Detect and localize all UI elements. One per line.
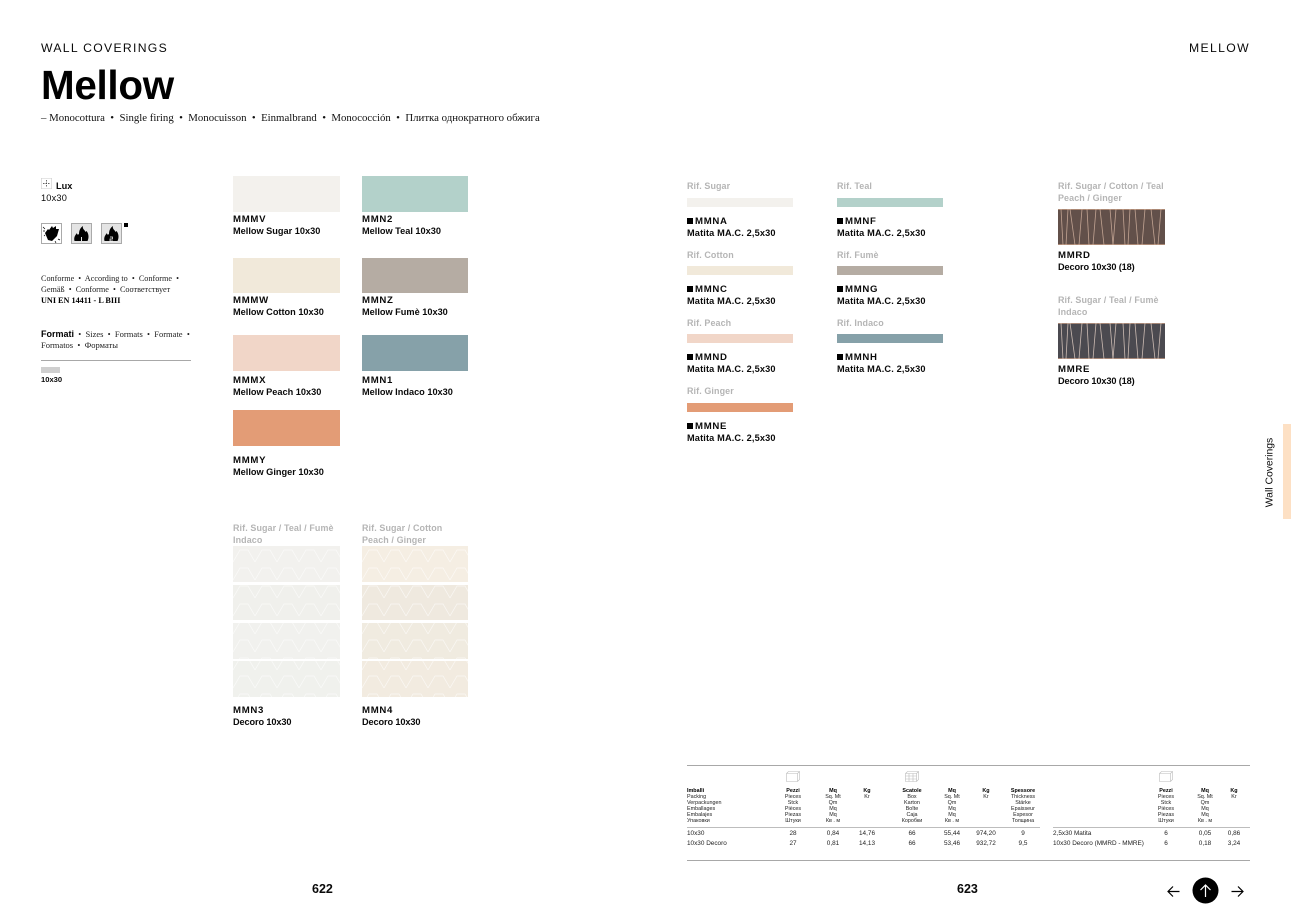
label: MMN4 references: Rif. Sugar / Cotton xyxy=(362,523,442,533)
column: box sq m: Qm xyxy=(948,800,956,806)
swatch: Teal xyxy=(362,176,468,212)
column: box sq m: Mq xyxy=(948,806,956,812)
table row: 10x30 Decoro: 27 xyxy=(789,840,797,847)
column: trim pieces: Pièces xyxy=(1158,806,1174,812)
trim: Fumè reference: Rif. Fumè xyxy=(837,250,879,260)
column: thickness: Spessore xyxy=(1011,788,1035,794)
table row: 10x30: 0,05 xyxy=(1199,830,1211,837)
trim swatch: Teal xyxy=(837,198,943,207)
table row: 10x30 Decoro: 10x30 Decoro xyxy=(687,840,727,847)
column: box: Caja xyxy=(906,812,918,818)
label: MMMW: MMMW xyxy=(233,295,269,306)
label: MMRE xyxy=(1058,364,1135,386)
trim label: MMNE xyxy=(687,421,776,443)
trim swatch: Peach xyxy=(687,334,793,343)
column: kg: Kr xyxy=(864,794,870,800)
table row: 10x30 Decoro: 14,13 xyxy=(859,840,875,847)
label: MMMY: Mellow Ginger 10x30 xyxy=(233,467,324,477)
table row: 10x30: 9 xyxy=(1021,830,1025,837)
column: sq m: Qm xyxy=(829,800,837,806)
trim label: MMNF: MMNF xyxy=(845,216,877,227)
column: sq m xyxy=(825,788,841,824)
column: box sq m xyxy=(927,788,977,824)
packing table xyxy=(687,765,1250,861)
arrow: next xyxy=(1231,885,1244,898)
swatch: Cotton xyxy=(233,258,340,293)
trim swatch: Cotton xyxy=(687,266,793,275)
column: box: Karton xyxy=(904,800,920,806)
column: trim kg: Kr xyxy=(1231,794,1237,800)
label: MMMW: Mellow Cotton 10x30 xyxy=(233,307,324,317)
column: sq m: Mq xyxy=(829,806,837,812)
trim swatch: Indaco xyxy=(837,334,943,343)
icon: pieces box xyxy=(786,771,800,782)
column: thickness: Thickness xyxy=(1011,794,1035,800)
column: trim pieces: Штуки xyxy=(1158,818,1174,824)
column: trim pieces xyxy=(1141,788,1191,824)
label: MMN3 references: Indaco xyxy=(233,535,262,545)
table row: 10x30 Decoro: 6 xyxy=(1164,840,1168,847)
column: trim kg: Kg xyxy=(1230,788,1238,794)
trim label: MMND: MMND xyxy=(695,352,728,363)
format: 10x30 xyxy=(41,193,67,203)
table row labels: Imballi xyxy=(687,788,704,794)
decor: MMRD references xyxy=(1058,181,1164,203)
trim label: MMND: Matita MA.C. 2,5x30 xyxy=(687,364,776,374)
label: MMRD: MMRD xyxy=(1058,250,1091,261)
finish name: Lux xyxy=(56,181,72,191)
trim label: MMNA: Matita MA.C. 2,5x30 xyxy=(687,228,776,238)
table row: 10x30: 55,44 xyxy=(944,830,960,837)
button: back to top xyxy=(1192,877,1219,904)
label: MMRD: Decoro 10x30 (18) xyxy=(1058,262,1135,272)
table row labels: Emballages xyxy=(687,806,715,812)
column: thickness: Epaisseur xyxy=(1011,806,1035,812)
label: MMN3: Decoro 10x30 xyxy=(233,717,291,727)
label: MMN3 xyxy=(233,705,292,727)
trim swatch: Sugar xyxy=(687,198,793,207)
arrow: previous xyxy=(1167,885,1180,898)
decor: MMRD references: Rif. Sugar / Cotton / Teal xyxy=(1058,181,1164,191)
side tab xyxy=(1283,424,1291,519)
table row: 10x30 xyxy=(687,829,1250,839)
standards text: UNI EN 14411 - L BIII xyxy=(41,296,120,305)
trim label: MMNF: Matita MA.C. 2,5x30 xyxy=(837,228,926,238)
column: trim pieces: Stck xyxy=(1161,800,1171,806)
table row: 10x30 Decoro: 66 xyxy=(908,840,916,847)
column: box kg: Kr xyxy=(983,794,989,800)
label: MMMY xyxy=(233,455,324,477)
trim swatch: Ginger xyxy=(687,403,793,412)
column: trim pieces: Pieces xyxy=(1158,794,1174,800)
trim label: MMNG: MMNG xyxy=(845,284,878,295)
column: thickness: Espesor xyxy=(1013,812,1033,818)
swatch: Ginger xyxy=(233,410,340,446)
label: MMN2: MMN2 xyxy=(362,214,393,225)
sizes text xyxy=(41,329,190,350)
trim label: MMNA xyxy=(687,216,776,238)
trim label: MMNA: MMNA xyxy=(695,216,728,227)
table row: 10x30 Decoro: 0,81 xyxy=(827,840,839,847)
label: MMN1 xyxy=(362,375,453,397)
column: sq m: Кв . м xyxy=(826,818,840,824)
page number left: 622 xyxy=(312,882,333,896)
column: pieces: Piezas xyxy=(785,812,801,818)
decor: MMRE references: Indaco xyxy=(1058,307,1087,317)
header: section label: WALL COVERINGS xyxy=(41,41,168,55)
table row labels: Verpackungen xyxy=(687,800,721,806)
sizes text: Formatos • Форматы xyxy=(41,340,118,350)
trim label: MMNE: MMNE xyxy=(695,421,727,432)
label: MMMX xyxy=(233,375,321,397)
tile: MMRE metallic decor xyxy=(1058,323,1165,359)
column: trim sq m: Sq. Mt xyxy=(1197,794,1213,800)
table row: 10x30 Decoro: 10x30 Decoro (MMRD - MMRE) xyxy=(1053,840,1144,847)
trim label: MMNH: Matita MA.C. 2,5x30 xyxy=(837,364,926,374)
label: MMMX: MMMX xyxy=(233,375,266,386)
trim swatch: Fumè xyxy=(837,266,943,275)
label: MMNZ: MMNZ xyxy=(362,295,394,306)
trim: Cotton reference: Rif. Cotton xyxy=(687,250,734,260)
trim label: MMNF xyxy=(837,216,926,238)
label: MMNZ: Mellow Fumè 10x30 xyxy=(362,307,448,317)
column: box sq m: Mq xyxy=(948,812,956,818)
table row: 10x30 Decoro: 53,46 xyxy=(944,840,960,847)
label: MMMV xyxy=(233,214,320,236)
label: MMMV: MMMV xyxy=(233,214,266,225)
column: box: Boîte xyxy=(906,806,918,812)
swatch: Sugar xyxy=(233,176,340,212)
table row: 10x30: 6 xyxy=(1164,830,1168,837)
column: box: Коробки xyxy=(902,818,922,824)
standards text: Conforme • According to • Conforme • xyxy=(41,274,179,283)
table row: 10x30: 2,5x30 Matita xyxy=(1053,830,1091,837)
column: trim pieces: Pezzi xyxy=(1159,788,1173,794)
label: MMN4 references: Peach / Ginger xyxy=(362,535,426,545)
label: MMMW xyxy=(233,295,324,317)
table row: 10x30: 14,76 xyxy=(859,830,875,837)
column: pieces: Штуки xyxy=(785,818,801,824)
column: pieces xyxy=(785,788,801,824)
column: sq m: Mq xyxy=(829,788,837,794)
table row: 10x30 Decoro xyxy=(687,839,1250,849)
column: pieces: Stck xyxy=(788,800,798,806)
table row: 10x30 Decoro: 9,5 xyxy=(1019,840,1027,847)
trim label: MMND xyxy=(687,352,776,374)
icon: fire class 2 xyxy=(101,223,122,244)
label: MMN1: Mellow Indaco 10x30 xyxy=(362,387,453,397)
table row: 10x30: 28 xyxy=(789,830,797,837)
swatch: Peach xyxy=(233,335,340,371)
tile: MMRD metallic decor xyxy=(1058,209,1165,245)
decor: MMRD references: Peach / Ginger xyxy=(1058,193,1122,203)
label: MMMV: Mellow Sugar 10x30 xyxy=(233,226,320,236)
column: trim pieces: Piezas xyxy=(1158,812,1174,818)
column: trim sq m: Кв . м xyxy=(1198,818,1212,824)
tile stack: MMN3 decor xyxy=(233,546,340,697)
decor: MMRE references: Rif. Sugar / Teal / Fumè xyxy=(1058,295,1159,305)
column: kg xyxy=(842,788,892,800)
trim: Peach reference: Rif. Peach xyxy=(687,318,731,328)
label: MMRE: Decoro 10x30 (18) xyxy=(1058,376,1135,386)
table row: 10x30: 10x30 xyxy=(687,830,704,837)
trim: Sugar reference: Rif. Sugar xyxy=(687,181,730,191)
column: box xyxy=(887,788,937,824)
trim: Indaco reference: Rif. Indaco xyxy=(837,318,884,328)
column: pieces: Pieces xyxy=(785,794,801,800)
column: box sq m: Кв . м xyxy=(945,818,959,824)
label: MMN3 references: Rif. Sugar / Teal / Fumè xyxy=(233,523,334,533)
trim label: MMNH: MMNH xyxy=(845,352,878,363)
table row labels: Embalajes xyxy=(687,812,712,818)
label: MMN4: MMN4 xyxy=(362,705,393,716)
table row: 10x30: 974,20 xyxy=(976,830,996,837)
trim: Teal reference: Rif. Teal xyxy=(837,181,872,191)
table row: 10x30: 66 xyxy=(908,830,916,837)
label: MMN1: MMN1 xyxy=(362,375,393,386)
label: MMN4 xyxy=(362,705,420,727)
column: sq m: Mq xyxy=(829,812,837,818)
column: box: Scatole xyxy=(902,788,922,794)
icon: abrasion resistance xyxy=(41,223,62,244)
standards text: Gemäß • Conforme • Соответствует xyxy=(41,285,170,294)
column: box kg xyxy=(961,788,1011,800)
tile stack: MMN4 decor xyxy=(362,546,468,697)
column: trim sq m: Mq xyxy=(1201,812,1209,818)
label: MMN3: MMN3 xyxy=(233,705,264,716)
side tab label: Wall Coverings xyxy=(1264,438,1276,507)
trim label: MMNC: Matita MA.C. 2,5x30 xyxy=(687,296,776,306)
icon: carton xyxy=(905,771,919,782)
trim label: MMNC: MMNC xyxy=(695,284,728,295)
subtitle: – Monocottura • Single firing • Monocuisson • Einmalbrand • Monococción • Плитка однократного обжига xyxy=(41,112,540,124)
page number right: 623 xyxy=(957,882,978,896)
swatch: Fumè xyxy=(362,258,468,293)
panel: product specs xyxy=(41,178,191,384)
label: MMN2: Mellow Teal 10x30 xyxy=(362,226,441,236)
trim label: MMNG: Matita MA.C. 2,5x30 xyxy=(837,296,926,306)
table row: 10x30 Decoro: 932,72 xyxy=(976,840,996,847)
column: sq m: Sq. Mt xyxy=(825,794,841,800)
column: trim kg xyxy=(1209,788,1259,800)
column: box sq m: Mq xyxy=(948,788,956,794)
column: box: Box xyxy=(907,794,917,800)
label: MMRD xyxy=(1058,250,1135,272)
trim label: MMNE: Matita MA.C. 2,5x30 xyxy=(687,433,776,443)
label: MMMY: MMMY xyxy=(233,455,266,466)
table row labels: Упаковки xyxy=(687,818,710,824)
trim label: MMNC xyxy=(687,284,776,306)
column: kg: Kg xyxy=(863,788,871,794)
size label: 10x30 xyxy=(41,375,62,384)
trim label: MMNH xyxy=(837,352,926,374)
label: MMN3 references xyxy=(233,523,334,545)
title: Mellow xyxy=(41,62,174,108)
column: box kg: Kg xyxy=(982,788,990,794)
table row: 10x30 Decoro: 0,18 xyxy=(1199,840,1211,847)
standards text xyxy=(41,274,179,305)
label: MMN4: Decoro 10x30 xyxy=(362,717,420,727)
column: trim sq m: Mq xyxy=(1201,806,1209,812)
column: trim sq m xyxy=(1180,788,1230,824)
column: trim sq m: Qm xyxy=(1201,800,1209,806)
size swatch xyxy=(41,367,60,373)
column: box sq m: Sq. Mt xyxy=(944,794,960,800)
label: MMMX: Mellow Peach 10x30 xyxy=(233,387,321,397)
column: pieces: Pezzi xyxy=(786,788,800,794)
table row labels xyxy=(687,788,722,824)
header: section label right: MELLOW xyxy=(1189,41,1250,55)
icon: trim box xyxy=(1159,771,1173,782)
column: thickness xyxy=(998,788,1048,824)
divider xyxy=(41,360,191,361)
table row: 10x30 Decoro: 3,24 xyxy=(1228,840,1240,847)
table row: 10x30: 0,86 xyxy=(1228,830,1240,837)
column: thickness: Толщина xyxy=(1012,818,1034,824)
label: MMN2 xyxy=(362,214,441,236)
icon: lux finish xyxy=(41,178,52,189)
trim label: MMNG xyxy=(837,284,926,306)
icon: small square marker xyxy=(124,223,128,227)
decor: MMRE references xyxy=(1058,295,1159,317)
column: pieces: Pièces xyxy=(785,806,801,812)
label: MMRE: MMRE xyxy=(1058,364,1090,375)
trim: Ginger reference: Rif. Ginger xyxy=(687,386,734,396)
table row: 10x30: 0,84 xyxy=(827,830,839,837)
swatch: Indaco xyxy=(362,335,468,371)
sizes text: Formati • Sizes • Formats • Formate • xyxy=(41,329,190,339)
label: MMN4 references xyxy=(362,523,442,545)
icon: fire class 1 xyxy=(71,223,92,244)
label: MMNZ xyxy=(362,295,448,317)
table row labels: Packing xyxy=(687,794,706,800)
column: trim sq m: Mq xyxy=(1201,788,1209,794)
column: thickness: Stärke xyxy=(1015,800,1031,806)
